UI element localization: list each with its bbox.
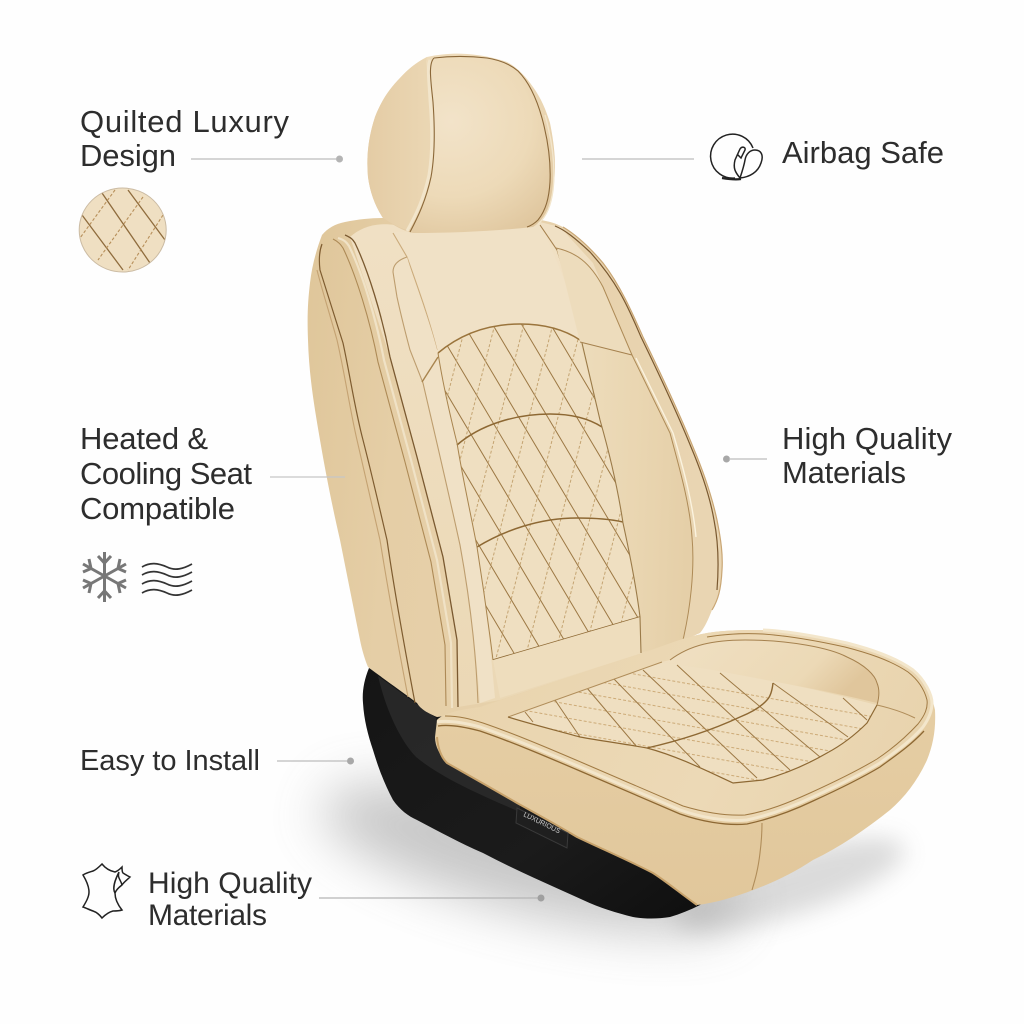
label: High Quality Materials (right): High Quality: [782, 421, 952, 456]
floor shadow under seat: [308, 753, 913, 963]
cushion lower trim: [437, 737, 697, 905]
label: Easy to Install: [80, 745, 354, 777]
logo badge on seat base: LUXURIOUS: [522, 812, 561, 835]
black seat base: [363, 668, 720, 918]
left side panel seams: [319, 244, 415, 703]
label: Heated and Cooling Seat Compatible: Compatible: [80, 491, 235, 526]
cushion edge piping: [437, 630, 932, 820]
label: Airbag Safe: Airbag Safe: [782, 135, 944, 170]
label: Quilted Luxury Design: Quilted Luxury: [80, 104, 290, 139]
label: Heated and Cooling Seat Compatible: Cooling Seat: [80, 456, 252, 491]
label: High Quality Materials (right): Materials: [782, 455, 906, 490]
upper center panel: [393, 224, 582, 353]
cushion rear bolster: [662, 640, 879, 703]
icon: heat waves: [142, 564, 192, 595]
label: High Quality Materials (bottom): Materials: [148, 899, 267, 932]
label: Quilted Luxury Design: Design: [80, 138, 176, 173]
lower back band: [493, 617, 645, 698]
quilted back panel: [438, 323, 640, 661]
cushion top surface: [437, 630, 932, 820]
label: Easy to Install: Easy to Install: [80, 745, 260, 777]
icon: airbag: [711, 134, 762, 179]
icon: snowflake: [83, 552, 126, 602]
backrest front surface: [350, 222, 693, 707]
label: Quilted Luxury Design: [80, 104, 343, 173]
label: Heated and Cooling Seat Compatible: Heated &: [80, 421, 208, 456]
icon: quilted leather swatch: [79, 188, 166, 272]
label: High Quality Materials (bottom): High Quality: [148, 867, 312, 900]
label: High Quality Materials (right): [723, 421, 952, 490]
cushion corner seam: [752, 823, 762, 890]
seat cushion: [435, 630, 935, 905]
label: Heated and Cooling Seat Compatible: [80, 421, 345, 526]
backrest: [308, 218, 723, 717]
logo badge on seat base: [516, 808, 568, 848]
right bolster: [580, 342, 693, 653]
backrest edge piping: [555, 226, 718, 590]
left inset strip: [393, 257, 495, 703]
quilted seat panel: [508, 662, 878, 784]
headrest: [367, 54, 555, 233]
illustration: car seat with beige quilted cover: [287, 54, 935, 918]
icon: leather hide: [83, 864, 130, 918]
label: High Quality Materials (bottom): [148, 867, 544, 932]
